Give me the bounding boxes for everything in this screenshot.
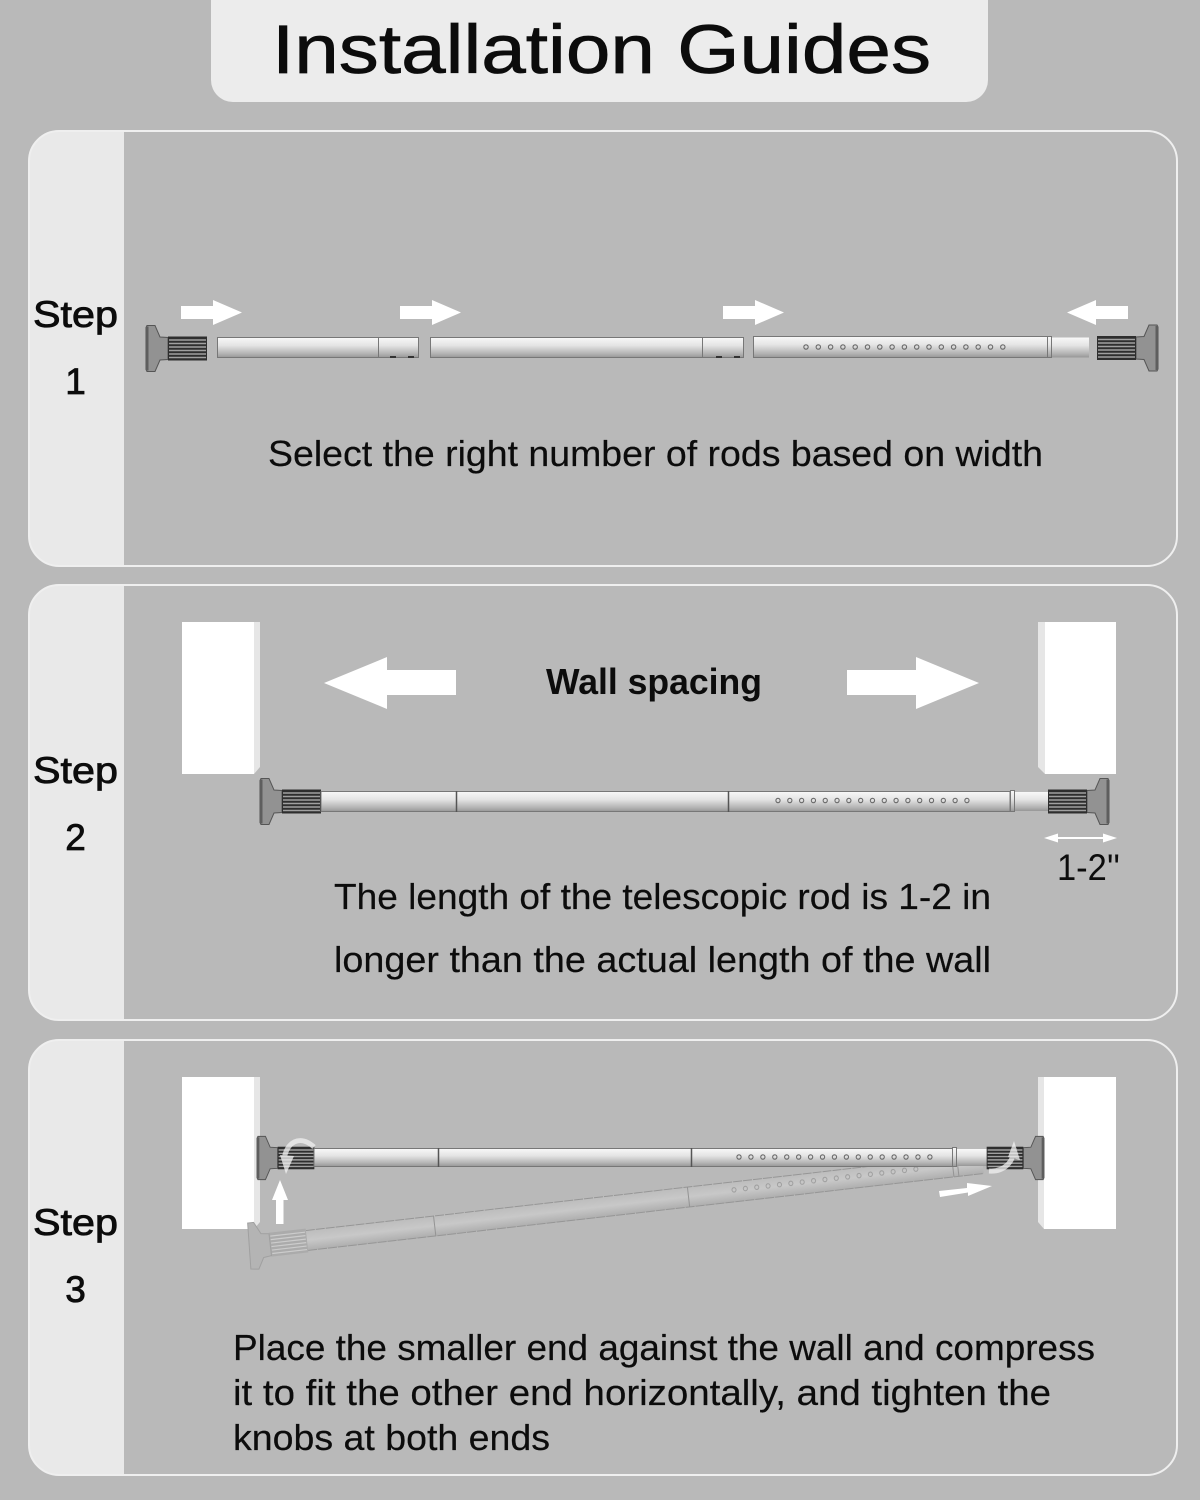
step 2 caption: longer than the actual length of the wall bbox=[334, 939, 991, 980]
title: Installation Guides bbox=[272, 11, 931, 88]
arrow: up bbox=[272, 1180, 288, 1224]
step 2 caption bbox=[334, 876, 991, 980]
panel: step 3 bbox=[29, 1040, 1177, 1475]
left wall bbox=[182, 1077, 260, 1229]
assembled rod bbox=[260, 778, 1109, 824]
rod segment 2 bbox=[430, 338, 744, 358]
step 3 caption: knobs at both ends bbox=[233, 1417, 550, 1458]
icon: twist arrow left bbox=[280, 1141, 314, 1174]
step 1 label: 1 bbox=[65, 361, 86, 402]
title banner bbox=[211, 0, 988, 102]
step 3 label: Step bbox=[33, 1202, 118, 1243]
step 2 label: Step bbox=[33, 750, 118, 791]
arrow: left bbox=[324, 657, 456, 709]
step 1 caption: Select the right number of rods based on width bbox=[268, 433, 1043, 474]
step 1 label bbox=[33, 294, 118, 402]
right wall bbox=[1038, 622, 1116, 774]
icon: twist arrow right bbox=[989, 1141, 1020, 1171]
panel: step 2 bbox=[29, 585, 1177, 1020]
step 2 caption: The length of the telescopic rod is 1-2 in bbox=[334, 876, 991, 917]
measurement label: 1-2'' bbox=[1057, 847, 1120, 888]
arrow: right bbox=[847, 657, 979, 709]
wall spacing label: Wall spacing bbox=[546, 661, 762, 702]
rod parts disassembled bbox=[146, 325, 1158, 372]
arrow: compress toward wall bbox=[939, 1183, 992, 1197]
step 3 caption bbox=[233, 1327, 1095, 1458]
step 3 caption: Place the smaller end against the wall and compress bbox=[233, 1327, 1095, 1368]
rod segment 3 with holes bbox=[754, 336, 1089, 358]
rod segment 1 bbox=[218, 338, 418, 358]
left end cap bbox=[146, 326, 207, 372]
panel: step 1 bbox=[29, 131, 1177, 566]
step 3 label: 3 bbox=[65, 1269, 86, 1310]
measurement arrow bbox=[1044, 834, 1117, 842]
tilted rod being inserted bbox=[246, 1140, 985, 1270]
right wall bbox=[1038, 1077, 1116, 1229]
arrows: step 1 push directions bbox=[181, 300, 1128, 325]
step 3 label bbox=[33, 1202, 118, 1310]
assembled rod against walls bbox=[257, 1136, 1044, 1180]
step 1 label: Step bbox=[33, 294, 118, 335]
step 2 label bbox=[33, 750, 118, 858]
right end cap bbox=[1097, 325, 1158, 371]
step 3 caption: it to fit the other end horizontally, and tighten the bbox=[233, 1372, 1051, 1413]
left wall bbox=[182, 622, 260, 774]
step 2 label: 2 bbox=[65, 817, 86, 858]
